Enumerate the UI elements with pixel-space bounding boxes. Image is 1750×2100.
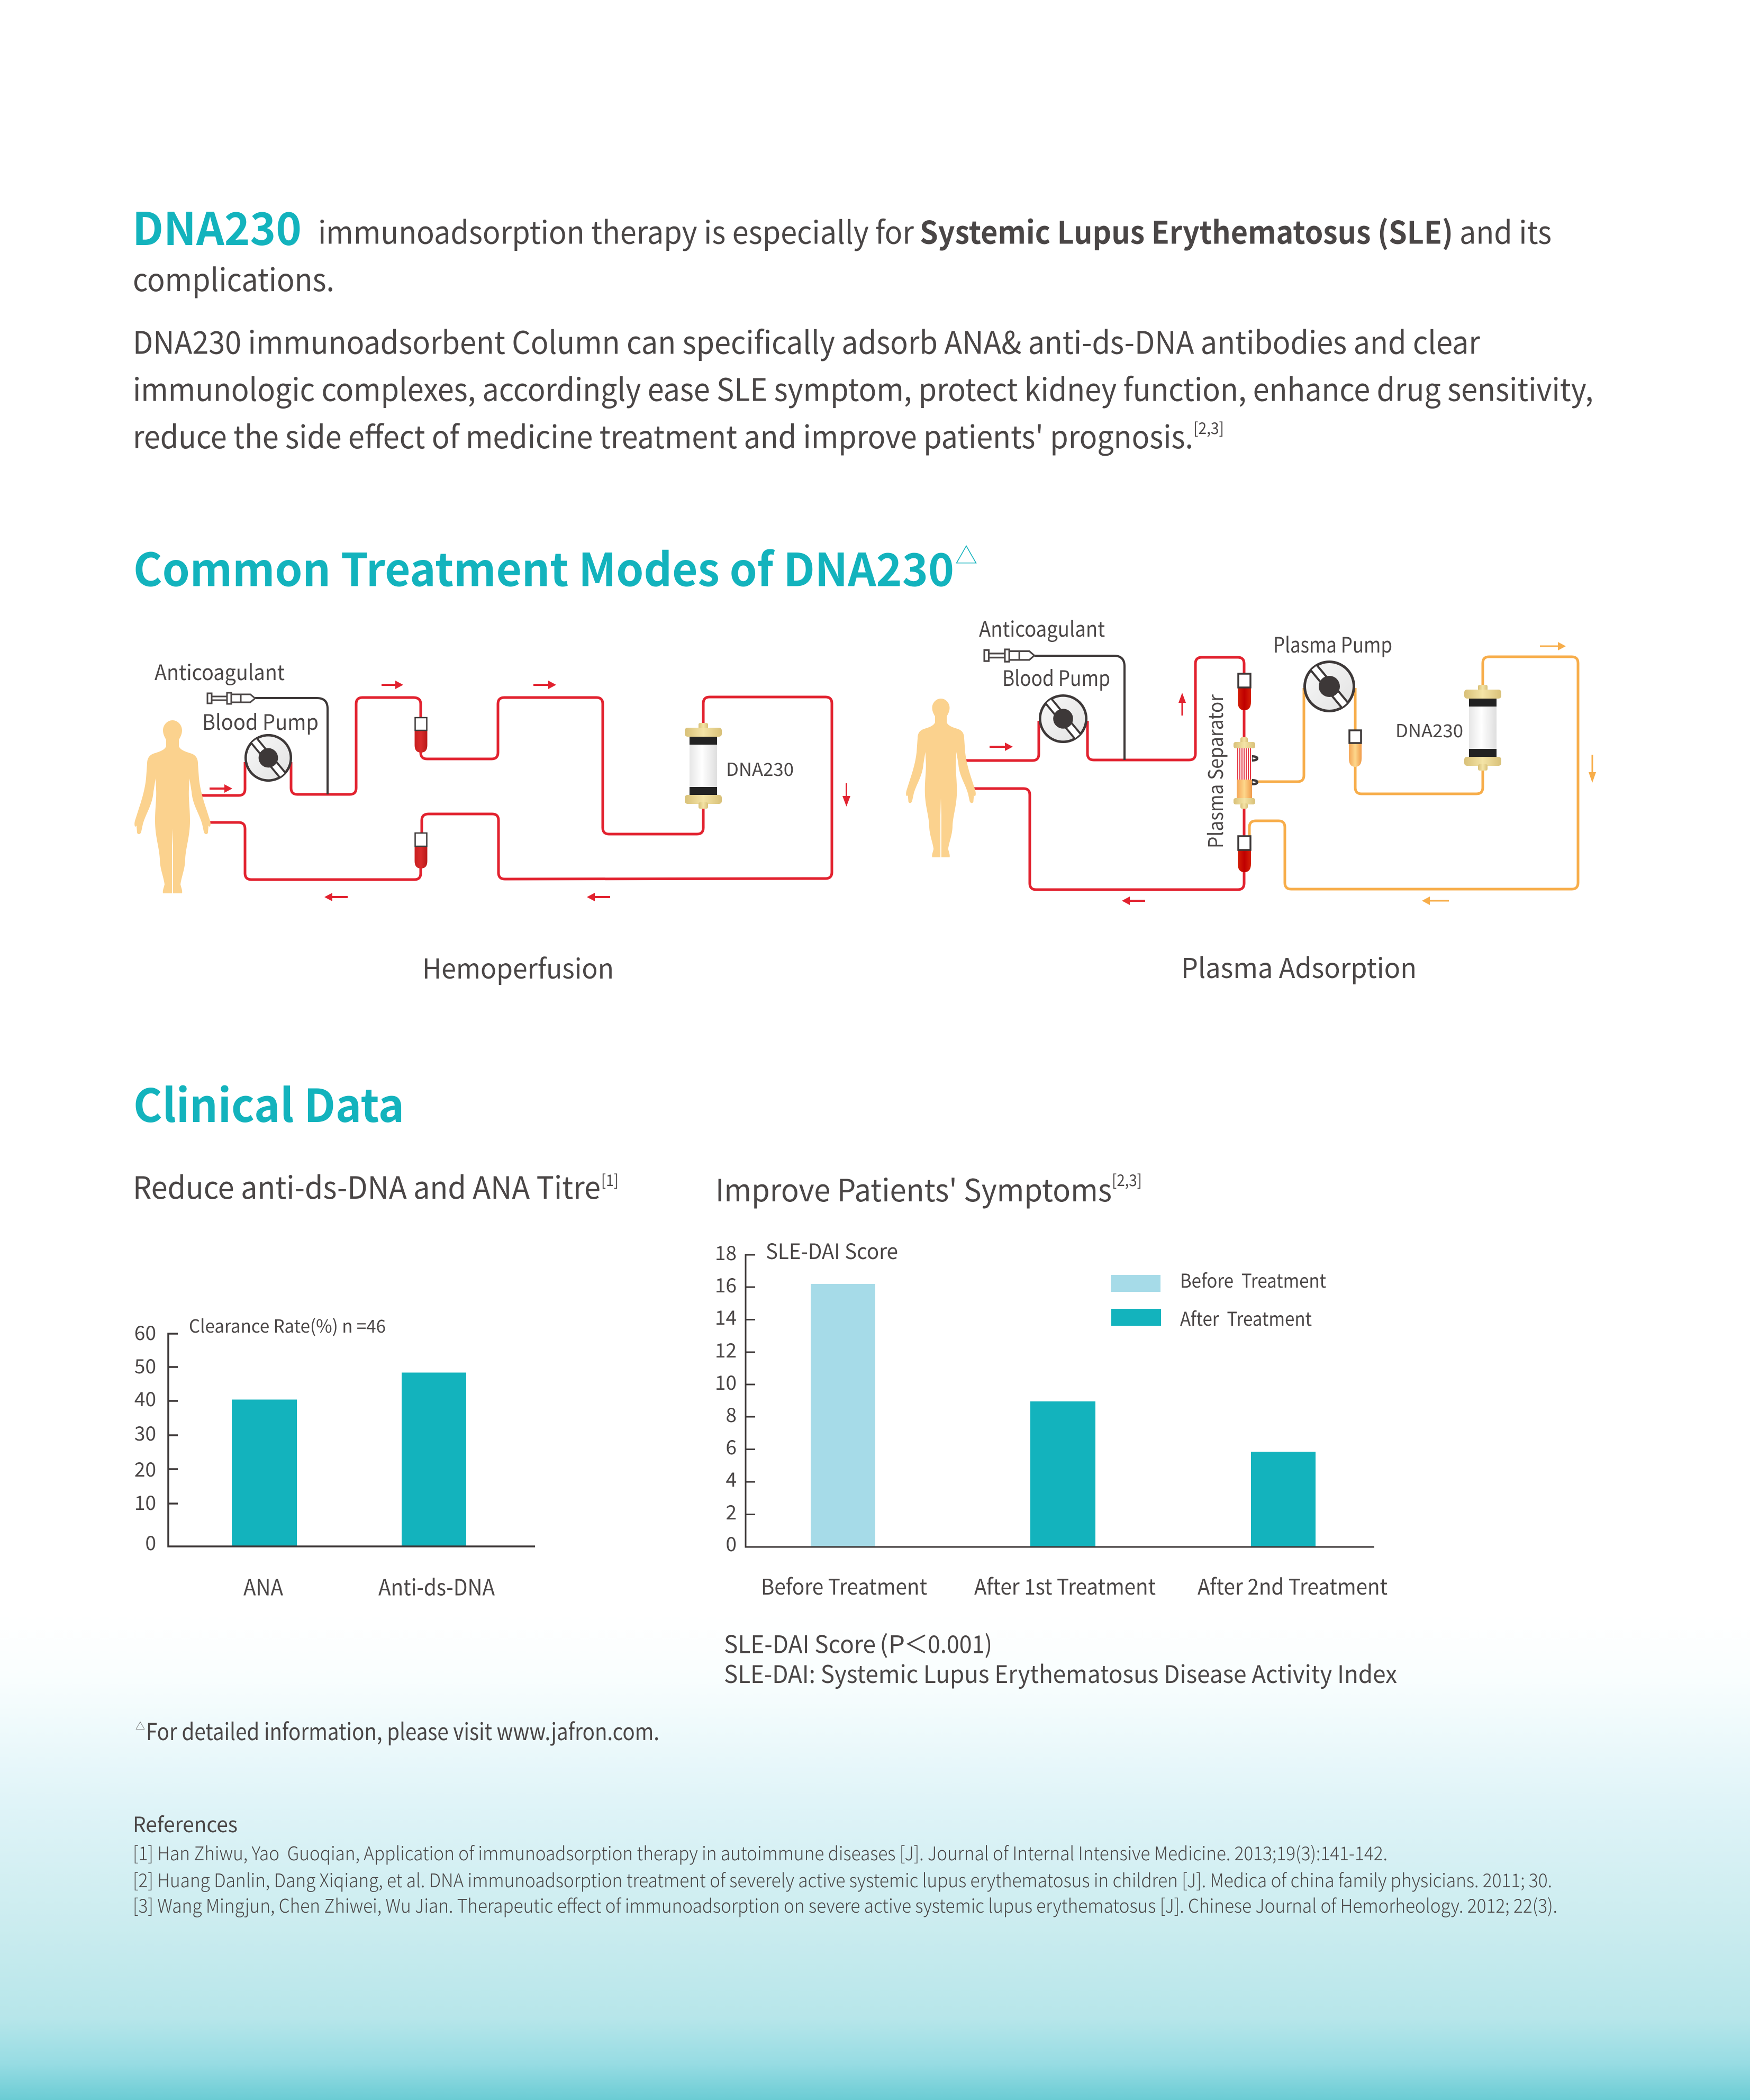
y axis labels: 10 (715, 1367, 737, 1396)
y axis labels: 50 (134, 1351, 156, 1379)
icon: plasma separator (1234, 737, 1258, 809)
y axis labels: 12 (715, 1335, 737, 1363)
x label: anti-ds-DNA: Anti-ds-DNA (378, 1570, 495, 1603)
diagram: plasma adsorption (906, 612, 1596, 986)
icon: bottom blood vial (1238, 836, 1251, 872)
chart title: Reduce anti-ds-DNA and ANA Titre (133, 1163, 601, 1208)
arrow: right orange (1540, 642, 1566, 650)
y axis labels (134, 1317, 156, 1556)
arrow: left 2 (587, 893, 610, 901)
arrow: left 1 (324, 893, 348, 901)
caption: hemoperfusion: Hemoperfusion (422, 947, 614, 986)
plasma adsorption orange tubing (1249, 657, 1578, 889)
heading: clinical data: Clinical Data (133, 1069, 404, 1135)
y axis labels (715, 1237, 737, 1557)
references heading: References (133, 1808, 238, 1839)
paragraph line 2: immunologic complexes, accordingly ease SLE symptom, protect kidney function, enhance drug sensitivity, (133, 365, 1593, 410)
legend swatch: before (1111, 1275, 1160, 1292)
chart title citation: [1] (601, 1167, 619, 1191)
axes and ticks (168, 1334, 535, 1546)
y axis labels: 10 (134, 1487, 156, 1516)
bar: after 2nd treatment (1251, 1452, 1316, 1547)
diagram: hemoperfusion (134, 656, 850, 986)
bar: before treatment (811, 1284, 875, 1547)
y axis labels: 0 (145, 1527, 156, 1556)
y axis labels: 16 (715, 1270, 737, 1298)
icon: DNA230 column (685, 723, 722, 809)
bar: anti-ds-DNA (402, 1373, 466, 1546)
y axis labels: 6 (726, 1432, 737, 1460)
icon: plasma pump (1305, 662, 1354, 711)
y axis labels: 30 (134, 1418, 156, 1446)
paragraph line 3: reduce the side effect of medicine treatment and improve patients' prognosis. (133, 412, 1193, 457)
footnote: For detailed information, please visit www.jafron.com. (146, 1713, 659, 1747)
legend label: after: After Treatment (1180, 1304, 1312, 1332)
legend swatch: after (1111, 1309, 1161, 1326)
note: p value: SLE-DAI Score (724, 1626, 876, 1661)
icon: DNA230 column (1464, 685, 1501, 771)
note: p value: 0.001) (928, 1626, 992, 1661)
icon: syringe (984, 649, 1035, 662)
label: blood pump: Blood Pump (1002, 662, 1110, 692)
arrow: left orange (1422, 897, 1449, 905)
icon: syringe (207, 693, 255, 704)
label: plasma pump: Plasma Pump (1273, 628, 1392, 659)
reference 2: [2] Huang Danlin, Dang Xiqiang, et al. DNA immunoadsorption treatment of severely active systemic lupus erythematosus in children [J]. Medica of china family physicians. 2011; 30. (133, 1866, 1552, 1893)
reference 3: [3] Wang Mingjun, Chen Zhiwei, Wu Jian. Therapeutic effect of immunoadsorption on severe active systemic lupus erythematosus [J]. Chinese Journal of Hemorheology. 2012; 22(3). (133, 1891, 1557, 1918)
anticoagulant tube (255, 698, 328, 794)
anticoagulant tube (1035, 656, 1125, 760)
paragraph citation: [2,3] (1193, 415, 1224, 439)
intro text block (132, 193, 1593, 457)
arrow: right from body (990, 743, 1013, 751)
icon: upper blood vial (415, 718, 428, 753)
label: anticoagulant: Anticoagulant (979, 612, 1105, 643)
legend label: before: Before Treatment (1180, 1266, 1326, 1293)
caption: plasma adsorption: Plasma Adsorption (1181, 946, 1417, 986)
bar: ANA (232, 1399, 297, 1546)
y axis labels: 2 (726, 1497, 737, 1525)
reference 1: [1] Han Zhiwu, Yao Guoqian, Application of immunoadsorption therapy in autoimmune diseases [J]. Journal of Internal Intensive Medicine. 2013;19(3):141-142. (133, 1839, 1388, 1866)
chart title citation: [2,3] (1112, 1167, 1142, 1191)
arrow: down (842, 783, 850, 807)
axis caption: Clearance Rate(%) n =46 (189, 1312, 386, 1338)
icon: top blood vial (1238, 674, 1251, 710)
icon: human body (134, 720, 211, 893)
panel: titre chart (133, 1163, 619, 1603)
x label: before treatment: Before Treatment (761, 1569, 927, 1601)
icon: human body (906, 699, 976, 857)
heading triangle mark: △ (955, 538, 977, 571)
x label: after 2nd treatment: After 2nd Treatment (1198, 1569, 1388, 1601)
icon: lower blood vial (415, 833, 428, 868)
arrow: right 1 (382, 681, 403, 689)
intro sentence bold disease name: Systemic Lupus Erythematosus (SLE) (920, 207, 1453, 253)
x label: ANA: ANA (243, 1570, 283, 1603)
label: DNA230: DNA230 (726, 755, 794, 781)
note: p value (724, 1626, 992, 1661)
bar: after 1st treatment (1030, 1401, 1095, 1547)
label: plasma separator: Plasma Separator (1200, 694, 1229, 848)
arrow: up (1178, 693, 1186, 716)
footnote: △ (135, 1719, 145, 1733)
y axis labels: 40 (134, 1383, 156, 1412)
axis caption: SLE-DAI Score (766, 1235, 898, 1265)
y axis labels: 60 (134, 1317, 156, 1346)
intro sentence start: immunoadsorption therapy is especially for (318, 207, 914, 253)
note: abbreviation: SLE-DAI: Systemic Lupus Erythematosus Disease Activity Index (724, 1655, 1397, 1690)
y axis labels: 4 (726, 1464, 737, 1492)
intro sentence end: and its (1459, 207, 1552, 253)
plasma adsorption red tubing (965, 657, 1244, 890)
y axis labels: 0 (726, 1528, 737, 1557)
arrow: down orange (1589, 755, 1596, 783)
hemoperfusion tubing (201, 697, 832, 880)
product name: DNA230 (132, 193, 302, 258)
intro second line: complications. (133, 255, 334, 300)
heading: common treatment modes: Common Treatment Modes of DNA230 (133, 533, 954, 599)
icon: plasma vial (1349, 730, 1362, 767)
y axis labels: 14 (715, 1302, 737, 1330)
icon: blood pump (246, 735, 291, 781)
y axis labels: 18 (715, 1237, 737, 1266)
panel: symptoms chart (715, 1166, 1397, 1690)
y axis labels: 20 (134, 1454, 156, 1482)
x label: after 1st treatment: After 1st Treatment (974, 1569, 1156, 1601)
chart title: Improve Patients' Symptoms (715, 1166, 1112, 1210)
note: p value: ＜ (904, 1626, 928, 1661)
axes and ticks (746, 1255, 1374, 1547)
label: blood pump: Blood Pump (202, 705, 319, 736)
icon: blood pump (1040, 695, 1086, 742)
references (133, 1808, 1557, 1918)
label: DNA230: DNA230 (1395, 717, 1463, 743)
arrow: right 2 (533, 681, 556, 689)
paragraph line 1: DNA230 immunoadsorbent Column can specifically adsorb ANA& anti-ds-DNA antibodies and clear (133, 318, 1480, 363)
arrow: left red (1122, 897, 1145, 905)
label: anticoagulant: Anticoagulant (155, 656, 285, 686)
arrow: right from body (210, 784, 232, 793)
y axis labels: 8 (726, 1399, 737, 1428)
note: p value: (P (879, 1626, 905, 1661)
